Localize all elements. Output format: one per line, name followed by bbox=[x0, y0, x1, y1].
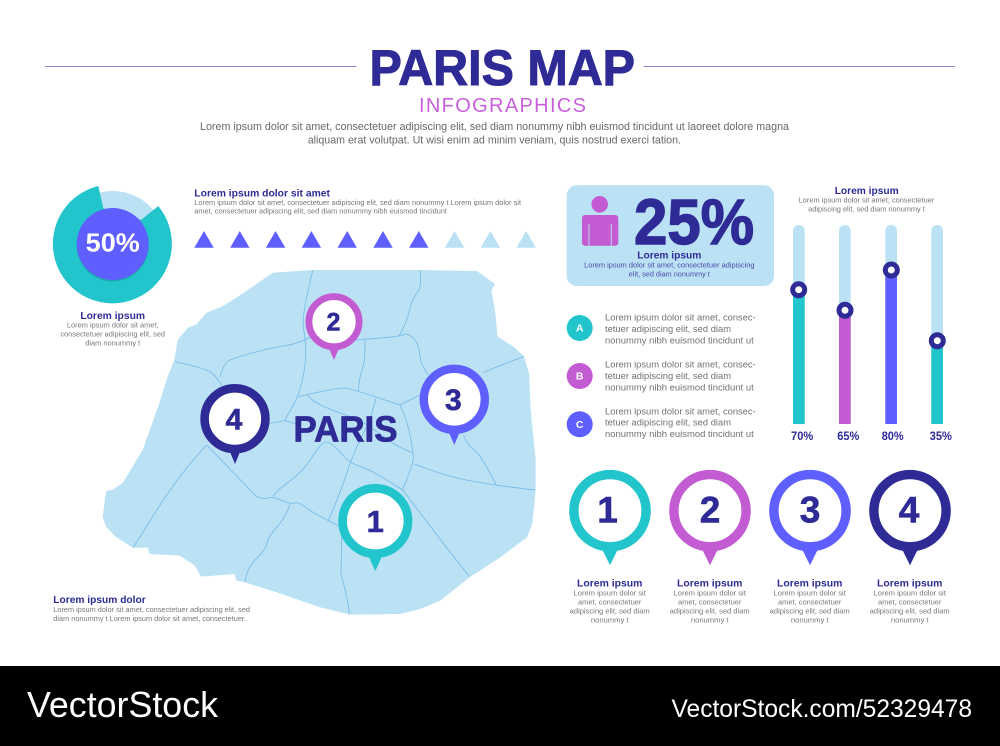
map pin 4: 4 bbox=[226, 404, 243, 436]
legend item B: Lorem ipsum dolor sit amet, consec- bbox=[605, 360, 756, 371]
legend item B: nonummy nibh euismod tincidunt ut bbox=[605, 382, 754, 393]
legend item A: tetuer adipiscing elit, sed diam bbox=[605, 324, 731, 335]
numbered marker 3 bbox=[770, 475, 850, 625]
numbered marker 1: nonummy t bbox=[591, 616, 629, 625]
intro text: Lorem ipsum dolor sit amet, consectetuer adipiscing elit, sed diam nonummy nibh euismod tincidunt ut laoreet dolore magna bbox=[200, 121, 790, 133]
donut caption: diam nonummy t bbox=[85, 338, 141, 348]
numbered marker 3: adipiscing elit, sed diam bbox=[770, 607, 850, 616]
panel caption: elit, sed diam nonummy t bbox=[629, 270, 711, 279]
numbered marker 3: amet, consectetuer bbox=[778, 598, 842, 607]
bar chart heading: Lorem ipsum dolor sit amet, consectetuer bbox=[799, 196, 935, 205]
numbered marker 1: adipiscing elit, sed diam bbox=[570, 607, 650, 616]
legend item C: tetuer adipiscing elit, sed diam bbox=[605, 418, 731, 429]
numbered marker 1: Lorem ipsum bbox=[577, 578, 642, 590]
numbered marker 1: 1 bbox=[597, 490, 618, 530]
donut caption: Lorem ipsum bbox=[80, 310, 145, 322]
bar 35% bbox=[930, 225, 952, 443]
numbered marker 1: Lorem ipsum dolor sit bbox=[574, 589, 647, 598]
bottom left text block: Lorem ipsum dolor bbox=[53, 594, 146, 606]
legend item B: tetuer adipiscing elit, sed diam bbox=[605, 371, 731, 382]
map pin 1: 1 bbox=[367, 504, 384, 539]
numbered marker 3: nonummy t bbox=[791, 616, 829, 625]
legend item A bbox=[567, 313, 756, 346]
legend item A: Lorem ipsum dolor sit amet, consec- bbox=[605, 313, 756, 324]
intro text: aliquam erat volutpat. Ut wisi enim ad minim veniam, quis nostrud exerci tation. bbox=[308, 134, 681, 146]
footer watermark bar: VectorStock.com/52329478 bbox=[672, 695, 972, 723]
bar chart heading: Lorem ipsum bbox=[835, 185, 899, 197]
legend item A: nonummy nibh euismod tincidunt ut bbox=[605, 335, 754, 346]
big number: 25% bbox=[634, 186, 754, 258]
map pin 3 bbox=[424, 369, 485, 445]
donut chart 50%: 50% bbox=[86, 228, 140, 258]
icon: person bbox=[582, 196, 618, 246]
bar chart heading: adipiscing elit, sed diam nonummy t bbox=[808, 205, 926, 214]
legend item C: nonummy nibh euismod tincidunt ut bbox=[605, 429, 754, 440]
top text block: amet, consectetuer adipiscing elit, sed diam nonummy nibh euismod tincidunt bbox=[194, 207, 448, 216]
bar 70% bbox=[791, 225, 813, 443]
donut caption bbox=[60, 310, 165, 348]
map pin 2: 2 bbox=[327, 309, 340, 337]
map pin 3: 3 bbox=[445, 384, 462, 417]
numbered marker 2: Lorem ipsum dolor sit bbox=[674, 589, 747, 598]
top text block: Lorem ipsum dolor sit amet, consectetuer adipiscing elit, sed diam nonummy t Lorem ipsum dolor sit bbox=[194, 198, 522, 207]
donut caption: consectetuer adipiscing elit, sed bbox=[60, 330, 165, 339]
donut caption: Lorem ipsum dolor sit amet, bbox=[67, 321, 159, 330]
header bbox=[45, 40, 955, 146]
bar 80%: 80% bbox=[882, 431, 904, 443]
panel: 25% statistic bbox=[567, 185, 774, 286]
numbered marker 2: nonummy t bbox=[691, 616, 729, 625]
donut chart 50% bbox=[53, 186, 172, 303]
bar 65% bbox=[837, 225, 859, 443]
footer watermark bar: VectorStock bbox=[27, 684, 219, 725]
numbered marker 4: nonummy t bbox=[891, 616, 929, 625]
triangle pictogram row bbox=[194, 231, 536, 248]
panel caption: Lorem ipsum bbox=[637, 250, 701, 262]
numbered marker 4 bbox=[870, 475, 950, 625]
numbered marker 4: Lorem ipsum bbox=[877, 578, 942, 590]
legend item B: B bbox=[576, 371, 584, 383]
subtitle: INFOGRAPHICS bbox=[419, 95, 586, 117]
panel caption: Lorem ipsum dolor sit amet, consectetuer adipiscing bbox=[584, 261, 754, 270]
numbered marker 2: amet, consectetuer bbox=[678, 598, 742, 607]
numbered marker 3: Lorem ipsum dolor sit bbox=[774, 589, 847, 598]
numbered marker 2: adipiscing elit, sed diam bbox=[670, 607, 750, 616]
legend item A: A bbox=[576, 323, 584, 335]
map pin 4 bbox=[205, 388, 265, 464]
numbered marker 3: Lorem ipsum bbox=[777, 578, 842, 590]
map pin 2 bbox=[309, 297, 359, 360]
numbered marker 4: adipiscing elit, sed diam bbox=[870, 607, 950, 616]
numbered marker 4: Lorem ipsum dolor sit bbox=[874, 589, 947, 598]
numbered marker 4: amet, consectetuer bbox=[878, 598, 942, 607]
top text block bbox=[194, 188, 522, 216]
numbered marker 2 bbox=[670, 475, 750, 625]
bar 70%: 70% bbox=[791, 431, 813, 443]
map label: PARIS bbox=[294, 409, 398, 450]
numbered marker 3: 3 bbox=[800, 490, 820, 530]
panel caption bbox=[584, 250, 754, 279]
numbered marker 2: 2 bbox=[700, 490, 720, 530]
legend item C: Lorem ipsum dolor sit amet, consec- bbox=[605, 406, 756, 417]
legend item C: C bbox=[576, 419, 584, 431]
paris map bbox=[103, 271, 535, 614]
bottom left text block: diam nonummy t Lorem ipsum dolor sit amet, consectetuer. bbox=[53, 614, 246, 623]
legend item C bbox=[567, 406, 756, 440]
numbered marker 1 bbox=[570, 475, 650, 625]
numbered marker 2: Lorem ipsum bbox=[677, 578, 742, 590]
footer watermark bar bbox=[0, 666, 1000, 746]
bar chart heading bbox=[799, 185, 935, 214]
numbered marker 4: 4 bbox=[899, 490, 920, 530]
intro text bbox=[200, 121, 790, 146]
bar 80% bbox=[882, 225, 904, 443]
top text block: Lorem ipsum dolor sit amet bbox=[194, 188, 330, 200]
bar chart bbox=[791, 225, 952, 443]
bottom left text block bbox=[53, 594, 250, 623]
legend item B bbox=[567, 360, 756, 393]
map pin 1 bbox=[343, 488, 408, 571]
bar 35%: 35% bbox=[930, 431, 952, 443]
bottom left text block: Lorem ipsum dolor sit amet, consectetuer adipiscing elit, sed bbox=[53, 605, 250, 614]
bar 65%: 65% bbox=[837, 431, 859, 443]
title: PARIS MAP bbox=[370, 40, 635, 96]
numbered marker 1: amet, consectetuer bbox=[578, 598, 642, 607]
